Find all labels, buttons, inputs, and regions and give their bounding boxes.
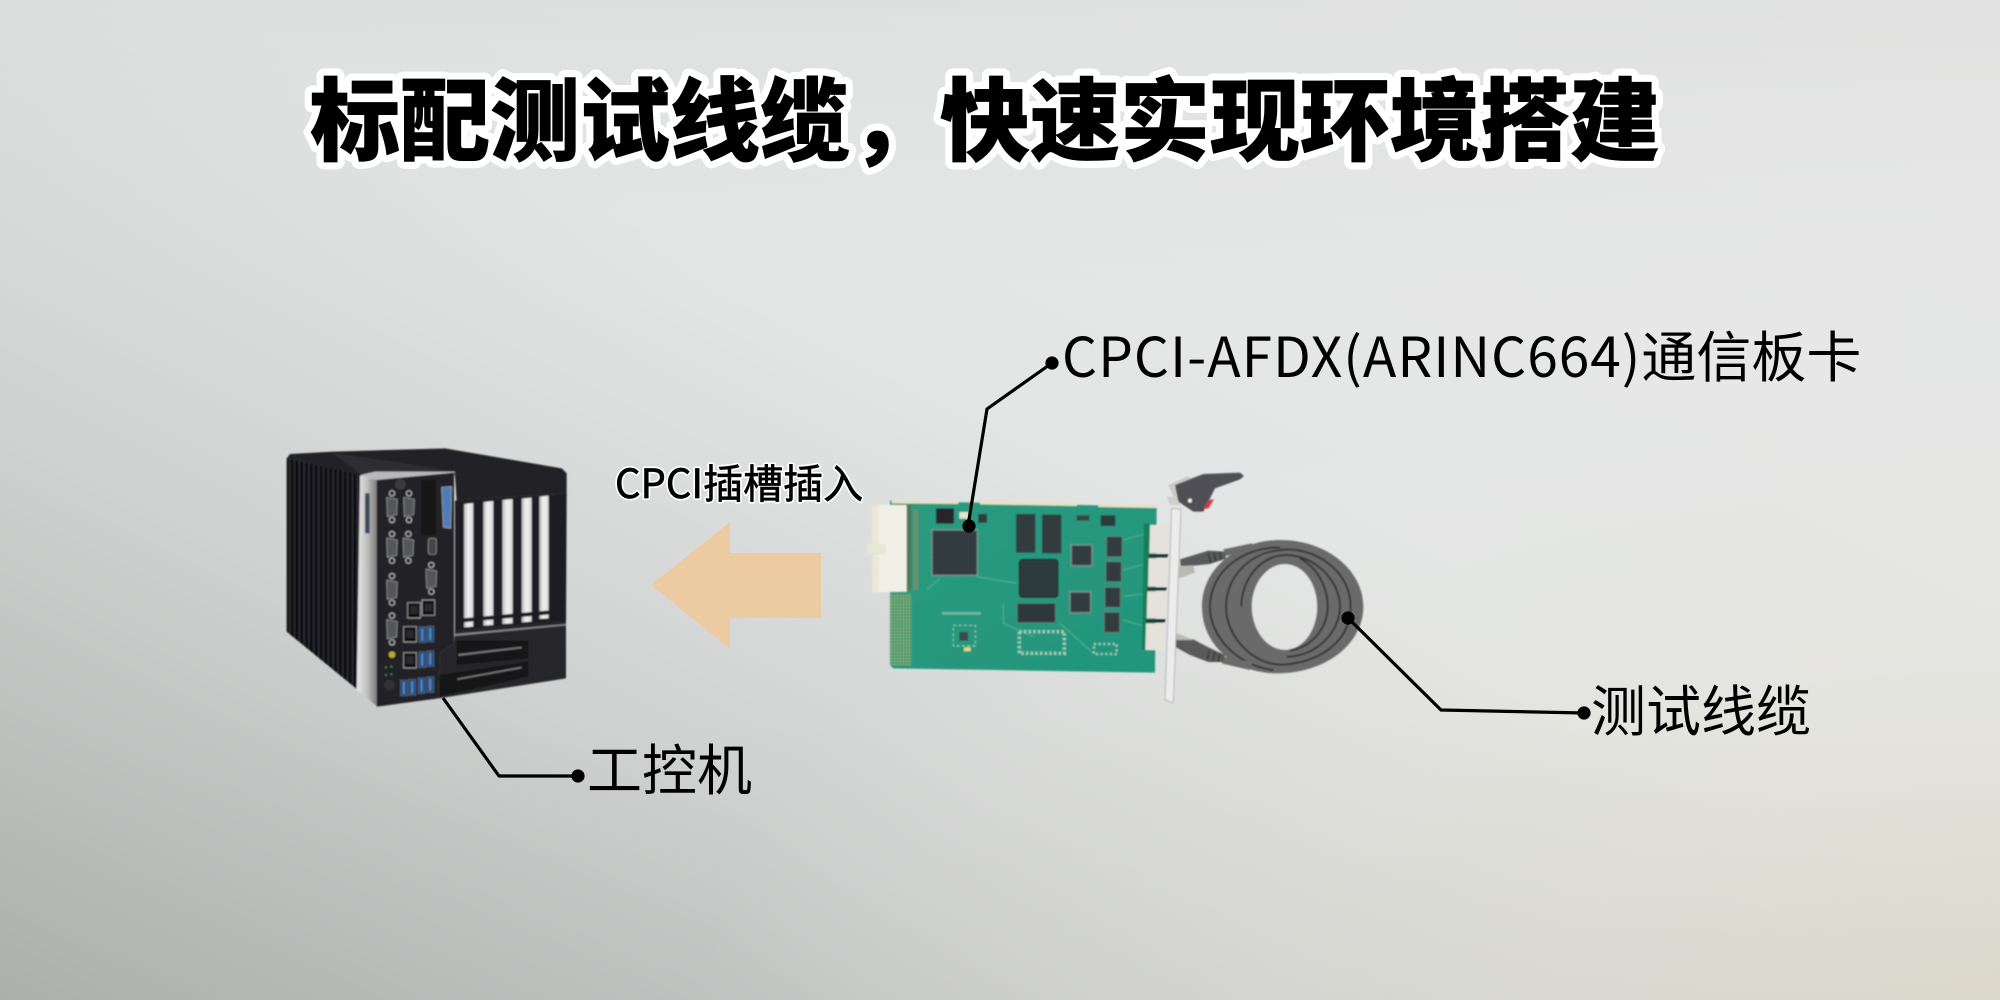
label: CPCI-AFDX card: CPCI-AFDX(ARINC664)通信板卡: [1062, 313, 1861, 393]
label: CPCI slot insert: CPCI插槽插入: [615, 452, 863, 510]
callout: cable label line: [1343, 613, 1589, 718]
title: 标配测试线缆，快速实现环境搭建: [310, 49, 1660, 179]
callout: card label line: [964, 358, 1057, 531]
icon: industrial computer: [287, 448, 567, 707]
icon: CPCI-AFDX card: [867, 500, 1169, 673]
label: CPCI slot insert: CPCI插槽插入: [615, 452, 863, 510]
callout: computer label line: [443, 698, 583, 781]
label: industrial computer: 工控机: [587, 726, 752, 806]
icon: coiled test cable with connectors and bracket: [1165, 473, 1363, 703]
title: 标配测试线缆，快速实现环境搭建: [310, 49, 1660, 179]
arrow: insert direction: [651, 522, 821, 649]
label: test cable: 测试线缆: [1591, 667, 1811, 747]
